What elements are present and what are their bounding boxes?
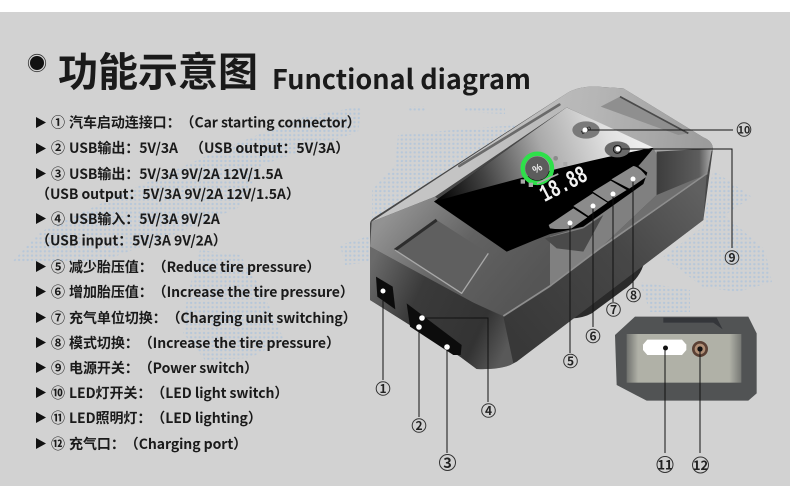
row 3 English: （USB output：5V/3A 9V/2A 12V/1.5A）: [36, 184, 300, 204]
device end body: [615, 317, 757, 401]
row 4 English: （USB input：5V/3A 9V/2A）: [36, 230, 227, 250]
strip beside panel: [550, 148, 657, 285]
callout 9: [616, 146, 739, 266]
callout 8: [627, 176, 640, 304]
row 11: LED照明灯：（LED lighting）: [69, 408, 262, 428]
charging port: [692, 341, 708, 357]
dotted world map background: [12, 106, 772, 360]
long edge highlight: [503, 173, 707, 316]
callout 3: 3: [443, 452, 452, 473]
callout lines and numbers: [376, 122, 751, 474]
callout 12: 12: [693, 455, 708, 474]
row 9: 电源开关：（Power switch）: [69, 358, 258, 378]
row 2: USB输出：5V/3A: [69, 138, 179, 158]
unit button: [593, 181, 627, 202]
row 5: 减少胎压值：（Reduce tire pressure）: [69, 257, 320, 277]
callout 6: 6: [589, 328, 597, 344]
rear pocket: [601, 97, 688, 135]
LED switch button: [572, 121, 600, 139]
callout 9: 9: [728, 249, 736, 266]
callout 12: [692, 346, 708, 474]
device foot shadow: [570, 265, 643, 319]
row 7: 充气单位切换：（Charging unit switching）: [69, 308, 357, 328]
callout 2: [412, 324, 426, 434]
callout 4: [419, 315, 495, 419]
callout 7: 7: [610, 301, 617, 318]
row 2: ②: [51, 138, 65, 158]
side slot: [459, 105, 559, 166]
row 12: 充气口：（Charging port）: [69, 434, 247, 454]
row 7: ⑦: [51, 308, 65, 328]
callout 7: [607, 192, 620, 318]
callout 5: 5: [567, 352, 574, 370]
power button: [605, 141, 630, 157]
callout 8: 8: [630, 286, 637, 304]
secondary device illustration: [615, 317, 757, 401]
callout 10: [582, 122, 751, 138]
row 10: ⑩: [51, 383, 65, 403]
LED switch button: LED: [580, 126, 593, 136]
row 4: ④: [51, 209, 65, 229]
row 8: ⑧: [51, 333, 65, 353]
row 10: LED灯开关：（LED light switch）: [69, 383, 288, 403]
digital readout: 18.88: [535, 162, 593, 209]
row 2: （USB output：5V/3A）: [190, 138, 349, 158]
callout 11: 11: [657, 454, 673, 474]
end top recess: [663, 318, 723, 329]
battery ring display: %: [531, 161, 545, 176]
row 5: ⑤: [51, 257, 65, 277]
row 12: ⑫: [51, 434, 65, 454]
main device illustration: [370, 87, 713, 369]
connector panel: [407, 303, 462, 355]
callout 3: [440, 344, 456, 473]
callout 5: [564, 220, 577, 370]
mode button: [611, 166, 647, 189]
plus button: [573, 193, 607, 216]
row 2: [36, 138, 349, 158]
left front face: [370, 247, 513, 369]
top rim: [372, 87, 713, 222]
callout 1: [376, 288, 390, 397]
minus button: [549, 208, 587, 229]
row 1: 汽车启动连接口：（Car starting connector）: [69, 112, 361, 132]
end front face: [627, 334, 741, 383]
lower side face: [503, 175, 707, 364]
title: Chinese: 功能示意图: [58, 40, 258, 98]
battery ring display: [523, 154, 552, 183]
row 4: USB输入：5V/3A 9V/2A: [69, 209, 221, 229]
control panel: [434, 107, 653, 252]
row 9: ⑨: [51, 358, 65, 378]
title: English: Functional diagram: [272, 58, 531, 97]
callout 6: [586, 204, 600, 344]
front pocket: [395, 220, 488, 293]
row 3: ③: [51, 164, 65, 184]
callout 2: 2: [415, 417, 423, 434]
title bullet icon: [28, 54, 46, 72]
feature list: [36, 112, 361, 454]
right recess: [657, 148, 712, 197]
row 8: 模式切换：（Increase the tire pressure）: [69, 333, 340, 353]
callout 10: 10: [738, 122, 750, 138]
callout 1: 1: [379, 380, 387, 397]
connector 1: [376, 277, 395, 309]
status icons: [521, 156, 567, 187]
LED light: [643, 340, 686, 355]
row 1: ①: [51, 112, 65, 132]
callout 4: 4: [485, 402, 492, 419]
row 6: ⑥: [51, 282, 65, 302]
row 11: ⑪: [51, 408, 65, 428]
callout 11: [657, 346, 673, 474]
shadow under panel: [545, 215, 603, 252]
row 6: 增加胎压值：（Increase the tire pressure）: [69, 282, 354, 302]
device body: [370, 87, 713, 369]
lower top face: [370, 197, 603, 316]
row 3: USB输出：5V/3A 9V/2A 12V/1.5A: [69, 164, 284, 184]
